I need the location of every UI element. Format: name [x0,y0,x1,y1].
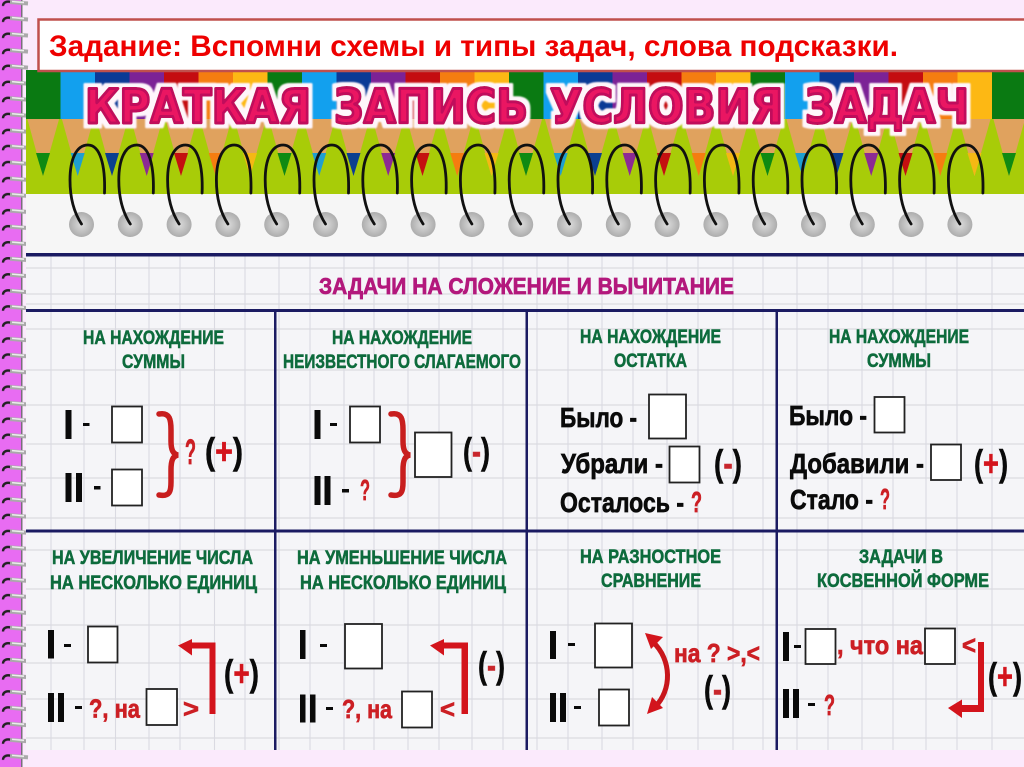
panel: indirect form [783,546,1022,722]
scheme row II [66,470,142,506]
banner title: КРАТКАЯ [85,80,311,135]
heading: ОСТАТКА [614,350,687,372]
scheme row I: < [962,630,976,660]
curved double arrow [645,633,668,714]
operation: (-) [478,645,505,686]
heading: ЗАДАЧИ В [859,546,943,568]
heading: НА НАХОЖДЕНИЕ [829,326,969,348]
scheme row II [300,692,455,728]
row Осталось: Осталось - [560,487,684,518]
heading: СУММЫ [867,350,931,372]
operation: (-) [463,431,490,472]
row Убрали: (-) [714,443,742,484]
grid paper [26,254,1024,750]
heading [297,547,507,594]
row Добавили [790,443,1008,484]
row Было [560,394,686,438]
row Добавили: (+) [974,443,1008,484]
scheme row II: ? [824,690,835,722]
heading: НА РАЗНОСТНОЕ [580,546,721,568]
scheme row I: , что на [837,630,923,660]
banner title: ЗАДАЧ [805,80,969,135]
pencil banner background [26,70,1024,194]
row Было: Было - [560,402,637,433]
heading: НА УВЕЛИЧЕНИЕ ЧИСЛА [52,547,253,569]
panel: unknown addend [283,327,521,507]
task box: Задание: Вспомни схемы и типы задач, слова подсказки. [49,30,898,63]
panel: sum 1 [66,327,243,506]
scheme row I [66,406,142,442]
scheme row II [550,690,629,726]
scheme row II [48,689,199,725]
answer box [415,432,452,477]
scheme row II: > [183,694,199,724]
heading: СРАВНЕНИЕ [601,570,701,592]
heading: КОСВЕННОЙ ФОРМЕ [817,568,989,592]
row Убрали: Убрали - [561,448,663,479]
heading [817,546,989,592]
panel: difference comparison [550,546,760,726]
operation: (+) [224,653,259,694]
scheme row I [314,406,380,442]
brace [391,414,410,495]
question and operation: (+) [205,431,243,472]
row Стало: ? [880,484,890,516]
row Добавили: Добавили - [790,448,924,479]
heading [580,546,721,592]
heading: НА НАХОЖДЕНИЕ [332,327,472,349]
scheme row II: < [440,694,455,724]
scheme row II [783,689,835,722]
scheme row I [783,628,976,664]
task box [38,20,1024,71]
row Стало: Стало - [790,484,873,515]
heading: НА УМЕНЬШЕНИЕ ЧИСЛА [297,547,507,569]
heading [50,547,258,594]
operation: (-) [704,669,731,710]
scheme row I [300,624,382,668]
arrow [178,639,216,714]
heading [829,326,969,372]
brace [159,414,178,495]
banner title: УСЛОВИЯ [550,80,783,135]
paper strip with holes [26,194,1024,254]
section heading: ЗАДАЧИ НА СЛОЖЕНИЕ И ВЫЧИТАНИЕ [319,273,734,299]
question and operation [185,431,243,472]
heading: НА НЕСКОЛЬКО ЕДИНИЦ [50,572,258,594]
scheme row I [48,626,118,662]
heading [283,327,521,373]
scheme row II: ? [360,475,370,507]
panel: increase [48,547,259,725]
row Убрали [561,443,742,484]
heading: СУММЫ [122,351,185,373]
table frame lines [26,253,1024,750]
heading: НА НАХОЖДЕНИЕ [83,327,224,349]
arrow [948,642,984,718]
panel: decrease [297,547,507,728]
row Осталось: ? [691,487,702,519]
scheme row II [314,475,370,507]
heading: НА НАХОЖДЕНИЕ [580,326,721,348]
scheme row I [550,624,632,668]
holes and spiral wire [69,145,983,237]
scheme row II: ?, на [89,694,140,724]
heading [83,327,224,373]
banner title: ЗАПИСЬ [334,80,528,135]
scheme row II: ?, на [342,694,392,724]
comparison text: на ? >,< [674,638,760,668]
row Было: Было - [789,400,867,431]
question and operation: ? [185,433,196,472]
notebook binding on left edge [0,0,30,767]
heading [580,326,721,372]
heading: НА НЕСКОЛЬКО ЕДИНИЦ [300,572,507,594]
panel: sum 2 [789,326,1008,516]
banner title [85,80,969,135]
panel: remainder [560,326,742,519]
heading: НЕИЗВЕСТНОГО СЛАГАЕМОГО [283,351,521,373]
arrow [430,639,468,714]
